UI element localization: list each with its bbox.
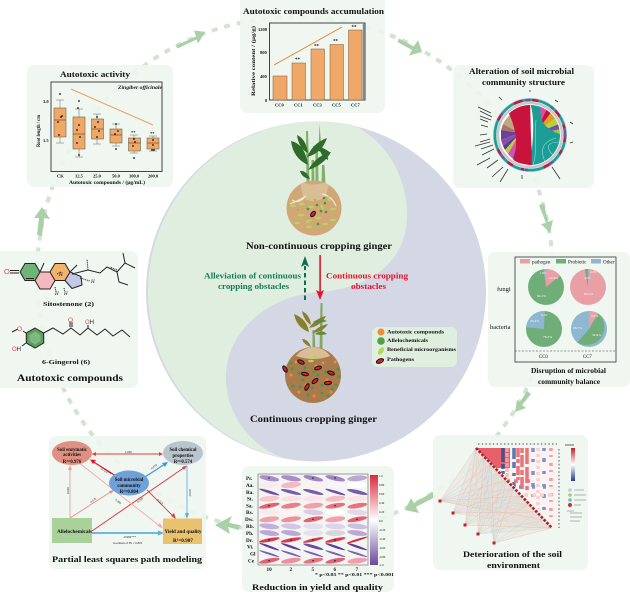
- legend item: beneficial microorganisms: Beneficial microorganisms: [387, 347, 456, 353]
- heading: accumulation: Autotoxic compounds accumulation: [243, 6, 384, 16]
- pie: bacteria CC0: [526, 311, 562, 347]
- node: soil enzymatic activities: [52, 441, 92, 465]
- box plot: root length: 3.0: [43, 99, 49, 104]
- arrow: balance to soil environment: [515, 391, 531, 412]
- row labels: Dr.: [246, 538, 254, 544]
- arrow: activity to accumulation: [176, 30, 205, 48]
- column labels: 5: [312, 567, 314, 573]
- text: alleviation of continuous cropping obstacles: [204, 272, 301, 291]
- chords: crimson band: [509, 105, 534, 165]
- arrow: autotoxic compounds to activity: [34, 207, 50, 236]
- ellipses: [259, 474, 368, 565]
- colorbar: -0.20: [379, 528, 386, 532]
- colorbar: 0.0: [379, 519, 383, 523]
- structure: sitostenone: [4, 253, 135, 297]
- box plot: root length: 25.0: [93, 174, 102, 178]
- structure: 6-gingerol: [12, 317, 130, 353]
- arrow: alleviation: [301, 256, 309, 300]
- bar chart: relative content: **: [333, 40, 338, 44]
- chords: left fan: [501, 113, 520, 163]
- heading: alteration: community structure: [482, 78, 566, 87]
- legend item: autotoxic compounds: Autotoxic compounds: [387, 330, 444, 336]
- structure: sitostenone: O: [4, 267, 10, 276]
- legend: soil components: [372, 327, 457, 367]
- pie: bacteria CC0: 23.4%: [530, 319, 539, 323]
- heading: PLS path modeling: Partial least squares path modeling: [52, 554, 203, 564]
- box plot: root length: Zingiber officinale: [117, 85, 163, 91]
- network nodes: [438, 500, 496, 544]
- pie: bacteria CC0: 0.4%: [541, 313, 548, 317]
- pie: fungi CC7: [570, 269, 606, 305]
- panel: alteration of soil microbial community structure: [453, 65, 594, 188]
- heading: alteration: Alteration of soil microbial: [469, 67, 575, 76]
- pie: fungi CC7: 0.4%: [590, 270, 597, 274]
- path coefficients: -0.618: [188, 489, 192, 497]
- box plot: root length: 50.0: [112, 174, 121, 178]
- bar chart: relative content: 1200: [258, 27, 268, 32]
- colorbar: 0.40: [379, 501, 385, 505]
- bar chart: relative content: CC3: [313, 102, 322, 108]
- heading: reduction: Reduction in yield and quality: [252, 582, 384, 592]
- structure: 6-gingerol: O: [17, 326, 22, 333]
- continuous soil ball with pathogens: [282, 347, 341, 403]
- node: soil microbial community: Soil microbial: [115, 478, 144, 483]
- structure: 6-gingerol: OH: [12, 347, 21, 353]
- path coefficients: 0.246: [114, 498, 122, 505]
- node: soil chemical properties: R²=0.574: [174, 459, 193, 465]
- path coefficients: 0.532: [156, 498, 164, 506]
- structure: 6-gingerol: O: [68, 317, 73, 324]
- node: soil chemical properties: Soil chemical: [169, 448, 197, 453]
- frame and legend: Other: [603, 260, 615, 266]
- frame and legend: pathogen: [532, 260, 551, 266]
- bar chart: relative content: 400: [260, 74, 268, 79]
- yin-yang central circle: [146, 121, 486, 462]
- heading: deterioration: [463, 549, 563, 570]
- significance legend: * p<0.05 ** p<0.01 *** p<0.001: [315, 572, 394, 577]
- row labels: Ce: [248, 558, 255, 564]
- arrow: accumulation to community structure: [398, 38, 422, 56]
- panel: autotoxic activity: [27, 65, 173, 187]
- bar chart: relative content: CC1: [294, 102, 303, 108]
- bar chart: relative content: **: [314, 44, 320, 50]
- text: alleviation of continuous cropping obstacles: cropping obstacles: [218, 282, 289, 291]
- bar chart: relative content: **: [352, 26, 357, 30]
- pie: fungi CC7: 4.1%: [584, 276, 591, 280]
- heading: deterioration: Deterioration of the soil: [463, 549, 563, 559]
- text: continuous cropping obstacles: obstacles: [351, 282, 386, 291]
- row labels: fungi: [497, 286, 511, 293]
- significance marks: [268, 477, 358, 561]
- node: soil chemical properties: [163, 441, 203, 465]
- row labels: St.: [247, 496, 254, 502]
- box plot: root length: **: [150, 131, 155, 136]
- column labels: 6: [334, 567, 336, 573]
- node: yield and quality: R²=0.907: [173, 538, 193, 544]
- row labels: Ra.: [246, 490, 254, 496]
- pie: bacteria CC0: 76.2%: [543, 335, 552, 339]
- row labels: Aa.: [246, 483, 254, 489]
- column labels: [266, 567, 358, 573]
- box plot: root length: Autotoxic compounds / (μg/mL): [69, 179, 145, 186]
- row labels: Ph.: [246, 531, 254, 537]
- heatmap axis ticks: [478, 444, 559, 528]
- arrow: soil environment to yield: [405, 492, 435, 513]
- heading: disruption: [531, 366, 606, 386]
- path coefficients: 1.026: [125, 450, 132, 454]
- network fan tint: [440, 448, 552, 543]
- bar chart: relative content: [250, 23, 365, 108]
- colorbar: 0.60: [379, 492, 385, 496]
- heading: continuous cropping ginger: Continuous cropping ginger: [250, 415, 378, 425]
- panel: partial least squares path modeling: [49, 436, 206, 569]
- heading: alteration: [469, 67, 575, 87]
- node: yield and quality: [163, 518, 202, 544]
- colorbar: -1.0: [379, 563, 384, 567]
- row labels: Vi.: [247, 544, 254, 550]
- node: allelochemicals: Allelochemicals: [57, 529, 92, 535]
- pie column labels: [539, 355, 592, 360]
- structure: sitostenone: H: [54, 292, 59, 297]
- heading: disruption: Disruption of microbial: [531, 366, 606, 375]
- box plot: root length: 1.5: [43, 138, 49, 143]
- structure: 6-gingerol: OH: [85, 320, 94, 326]
- path coefficients: 0.206: [136, 496, 144, 504]
- path coefficients: -0.729***: [100, 466, 113, 476]
- structure: sitostenone: H: [63, 292, 68, 297]
- column labels: 10: [266, 567, 272, 573]
- pie: fungi CC0: 1.8%: [540, 271, 547, 275]
- bar chart: relative content: **: [295, 58, 300, 63]
- correlation heatmap: [476, 448, 557, 528]
- structure: sitostenone: H: [90, 280, 95, 285]
- colorbar: 1.0: [379, 474, 383, 478]
- arrow: yield to path modeling: [215, 516, 240, 534]
- column labels: 2: [290, 567, 292, 573]
- box plot: root length: **: [131, 130, 136, 135]
- text: alleviation of continuous cropping obstacles: Alleviation of continuous: [204, 272, 301, 280]
- heading: autotoxic activity: Autotoxic activity: [60, 69, 131, 79]
- bar chart: relative content: CC5: [332, 102, 341, 108]
- node: soil enzymatic activities: Soil enzymatic: [57, 448, 88, 453]
- box plot: root length: CK: [57, 174, 64, 178]
- non-continuous soil ball: [286, 180, 342, 236]
- heading: deterioration: environment: [487, 560, 540, 570]
- path coefficients: 0.638: [66, 487, 70, 494]
- row labels: [490, 286, 511, 331]
- colorbar: -0.40: [379, 537, 386, 541]
- arrow: community structure to balance: [539, 204, 553, 233]
- box plot: root length: Root length / cm: [36, 114, 42, 147]
- text: continuous cropping obstacles: [326, 272, 408, 291]
- pie column labels: CC7: [583, 355, 592, 360]
- path coefficients: [66, 450, 192, 545]
- colorbar: [370, 474, 386, 567]
- heatmap colorbar and legend: [565, 445, 586, 521]
- colorbar: 0.20: [379, 510, 385, 514]
- node: soil microbial community: community: [117, 484, 141, 489]
- chords: right upper strips: [540, 106, 560, 134]
- node: soil chemical properties: properties: [173, 454, 194, 459]
- chords: teal band: [530, 105, 560, 165]
- path coefficients: -0.992***: [123, 535, 136, 539]
- pie: fungi CC0: [528, 269, 564, 305]
- panel: autotoxic compounds: [0, 251, 138, 388]
- panel: autotoxic compounds accumulation: [240, 0, 385, 113]
- bar chart: relative content: 0: [265, 98, 268, 103]
- box plot: root length: 12.5: [75, 174, 84, 178]
- panel: deterioration of the soil environment: [433, 435, 588, 570]
- heading: disruption: community balance: [538, 377, 601, 386]
- pie: bacteria CC7: [571, 311, 607, 347]
- box plot: root length: 200.0: [148, 174, 159, 178]
- bar chart: relative content: CC0: [275, 102, 284, 108]
- node: yield and quality: Yield and quality: [164, 529, 202, 535]
- text: continuous cropping obstacles: Continuous cropping: [326, 272, 408, 280]
- label: 6-gingerol: 6-Gingerol (6): [42, 359, 90, 366]
- pie: bacteria CC7: 52.9%: [592, 333, 601, 337]
- pie: fungi CC7: 95.5%: [584, 292, 593, 296]
- column labels: 7: [356, 567, 358, 573]
- node: soil enzymatic activities: R²=0.976: [63, 459, 82, 465]
- row labels: Rb.: [246, 524, 255, 530]
- bar chart: relative content: CC7: [351, 102, 360, 108]
- continuous ginger plant: [294, 303, 328, 352]
- pie: fungi CC0: 14.3%: [549, 276, 558, 280]
- chord diagram: [494, 98, 566, 172]
- node: soil microbial community: R²=0.804: [120, 489, 139, 495]
- colorbar: -0.60: [379, 546, 386, 550]
- heading: autotoxic compounds: Autotoxic compounds: [17, 374, 123, 384]
- box plot: root length: 100.0: [129, 174, 140, 178]
- row labels: bacteria: [490, 324, 511, 331]
- colorbar: 0.80: [379, 483, 385, 487]
- path coefficients: Goodness of Fit = 0.801: [113, 541, 143, 545]
- frame and legend: [515, 257, 616, 362]
- network fan lines: [440, 448, 552, 543]
- non-continuous ginger plant: [291, 124, 331, 184]
- panel: disruption of microbial community balance: [488, 252, 630, 387]
- row labels: [245, 476, 256, 564]
- pie column labels: CC0: [539, 355, 548, 360]
- path arrows: [68, 452, 189, 536]
- label: sitostenone: Sitostenone (2): [43, 301, 94, 308]
- panel: reduction in yield and quality: [242, 466, 394, 592]
- pie: bacteria CC7: 8.4%: [591, 314, 598, 318]
- colorbar: -0.80: [379, 555, 386, 559]
- heading: non-continuous cropping ginger: Non-continuous cropping ginger: [246, 242, 393, 252]
- row labels: Rs.: [246, 510, 254, 516]
- arrow: continuous cropping obstacles: [316, 255, 324, 300]
- pie: fungi CC0: 84.1%: [537, 294, 546, 298]
- row labels: Dw.: [245, 517, 254, 523]
- frame and legend: Probiotic: [568, 260, 587, 266]
- correlation ellipse matrix: [245, 474, 394, 577]
- path coefficients: -0.679: [149, 463, 158, 471]
- row labels: Pr.: [246, 476, 253, 482]
- chord outer labels: [475, 90, 573, 182]
- bar chart: relative content: Relative content / (μg/g): [250, 26, 257, 96]
- box plot: root length: [36, 82, 163, 186]
- dashed cycle ring: [37, 17, 553, 533]
- row labels: Sa.: [246, 504, 253, 510]
- node: soil enzymatic activities: activities: [63, 453, 81, 458]
- node: allelochemicals: [52, 518, 92, 543]
- structure: sitostenone: H: [58, 273, 63, 278]
- bar chart: relative content: 800: [260, 50, 268, 55]
- pie: bacteria CC7: 38.7%: [573, 326, 582, 330]
- row labels: Gl: [250, 552, 256, 558]
- node: soil microbial community: [109, 470, 149, 496]
- legend item: pathogens: Pathogens: [387, 357, 414, 363]
- path coefficients: 0.576: [89, 496, 98, 504]
- legend item: allelochemicals: Allelochemicals: [387, 338, 428, 344]
